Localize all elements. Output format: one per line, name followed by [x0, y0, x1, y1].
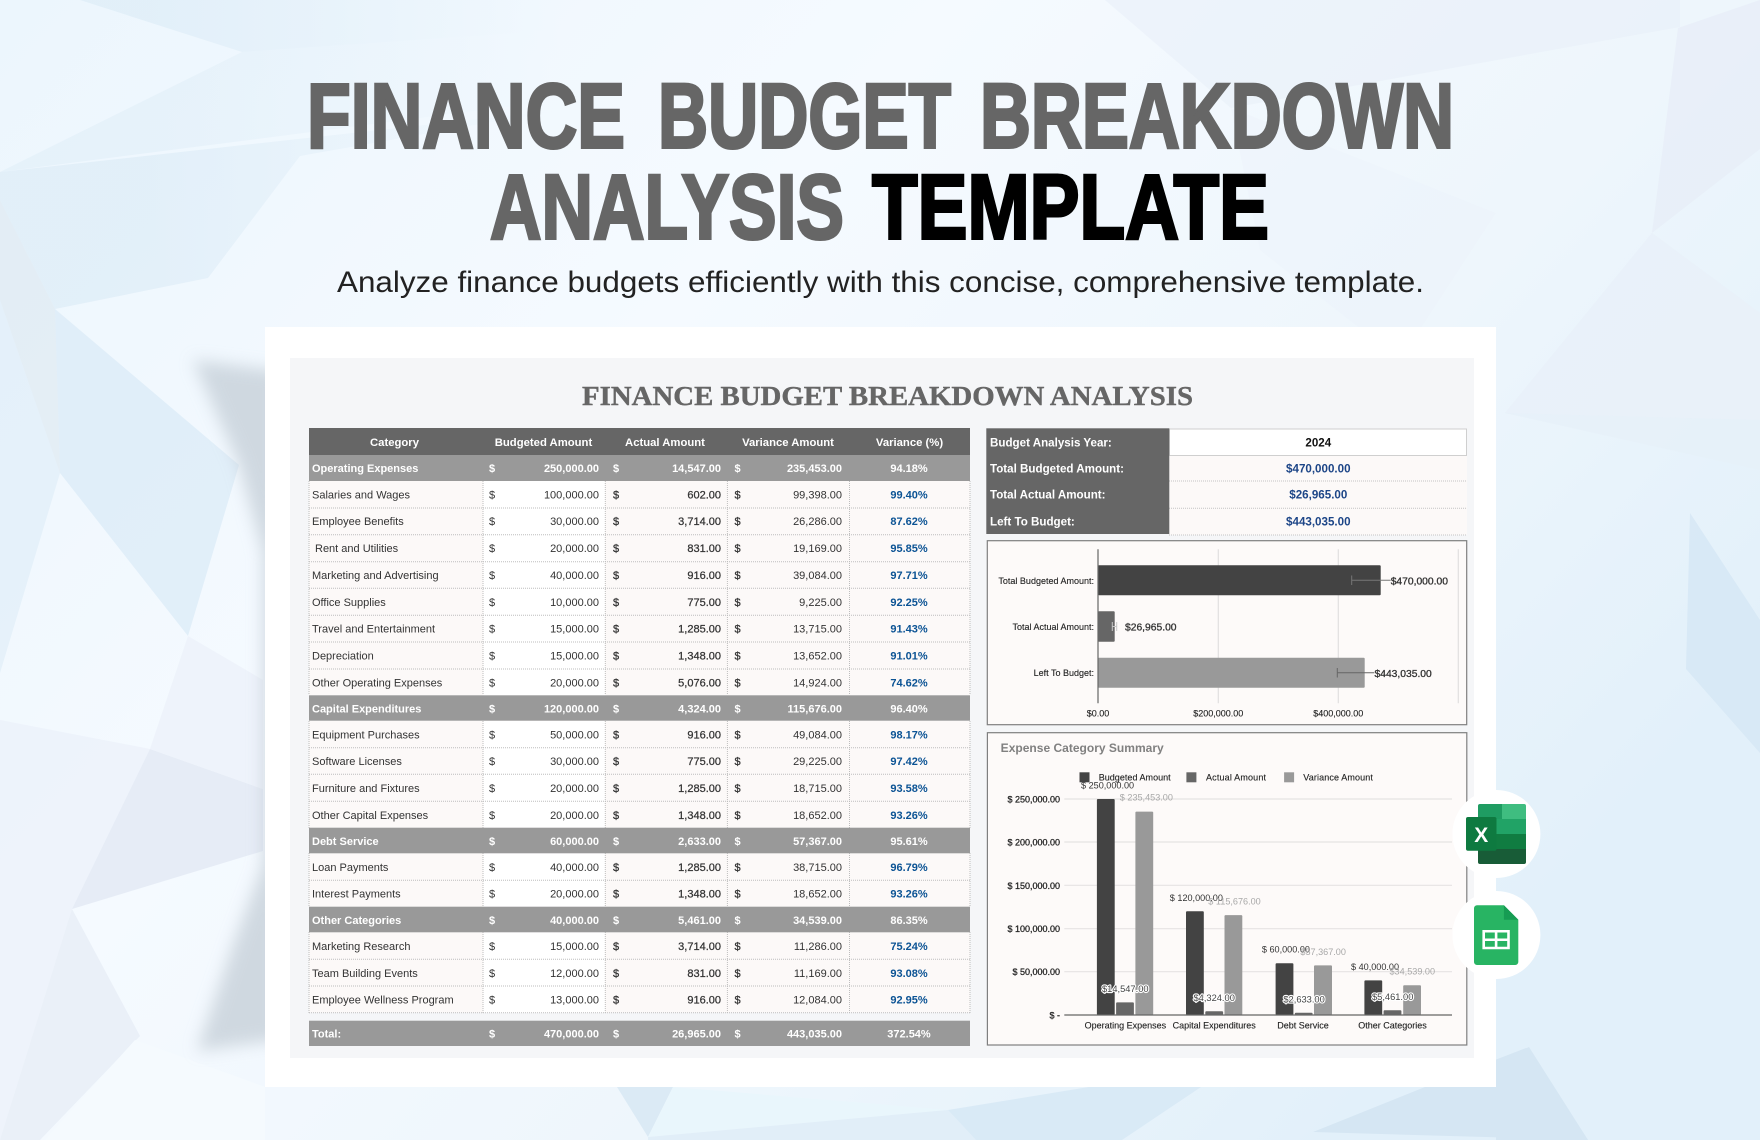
row: Equipment Purchases: Equipment Purchases [312, 730, 420, 742]
row: Travel and Entertainment: 91.43% [890, 624, 928, 636]
y axis labels: $ 150,000.00 [1007, 881, 1060, 891]
x axis labels [1087, 708, 1363, 718]
summary: left to budget [990, 516, 1351, 528]
legend: Budgeted Amount [1099, 772, 1171, 782]
data labels: $57,367.00 [1300, 947, 1346, 957]
row: Salaries and Wages [312, 490, 928, 502]
row: Other Operating Expenses: 74.62% [890, 678, 928, 690]
row: Marketing Research: 15,000.00 [550, 941, 599, 953]
section: Capital Expenditures: 115,676.00 [788, 703, 842, 715]
row: Interest Payments: 1,348.00 [678, 889, 721, 901]
x axis categories [1085, 1020, 1427, 1030]
row: Other Capital Expenses: $ [613, 810, 619, 822]
section: Other Categories: 5,461.00 [678, 915, 721, 927]
row: Marketing Research [312, 941, 928, 953]
subtitle: Analyze finance budgets efficiently with this concise, comprehensive template. [337, 266, 1424, 299]
bar: total budgeted [998, 565, 1448, 595]
row: Employee Wellness Program [312, 994, 928, 1006]
legend: Actual Amount [1206, 772, 1266, 782]
total row: 372.54% [887, 1028, 931, 1040]
row: Other Capital Expenses: $ [489, 810, 495, 822]
section: Operating Expenses: 94.18% [890, 463, 928, 475]
row: Depreciation: 91.01% [890, 650, 928, 662]
data labels: $4,324.00 [1194, 993, 1235, 1003]
summary block [986, 428, 1467, 535]
section: Debt Service: $ [734, 836, 741, 848]
row: Employee Benefits: $ [734, 516, 741, 528]
panel heading: FINANCE BUDGET BREAKDOWN ANALYSIS [582, 381, 1193, 411]
row: Salaries and Wages: $ [489, 490, 495, 502]
data labels [1081, 780, 1435, 1004]
x axis labels: $0.00 [1087, 708, 1109, 718]
y axis labels: $ 50,000.00 [1012, 967, 1060, 977]
data labels: $ 115,676.00 [1208, 896, 1261, 906]
section: Other Categories: $ [734, 915, 741, 927]
row: Other Capital Expenses: 20,000.00 [550, 810, 599, 822]
row: Marketing and Advertising: 39,084.00 [793, 570, 842, 582]
section: Operating Expenses: 250,000.00 [544, 463, 599, 475]
row: Travel and Entertainment: $ [613, 624, 619, 636]
row: Other Capital Expenses: Other Capital Expenses [312, 810, 429, 822]
row: Other Capital Expenses: $ [734, 810, 741, 822]
row: Travel and Entertainment: Travel and Entertainment [312, 624, 435, 636]
total row: 470,000.00 [544, 1028, 599, 1040]
row: Salaries and Wages: 602.00 [687, 490, 721, 502]
row: Team Building Events: $ [613, 968, 619, 980]
table header: Budgeted Amount [495, 437, 592, 449]
section: Capital Expenditures: 4,324.00 [678, 703, 721, 715]
row: Depreciation: 1,348.00 [678, 650, 721, 662]
data labels: $5,461.00 [1372, 992, 1413, 1002]
legend [1080, 772, 1373, 782]
row: Employee Wellness Program: 92.95% [890, 994, 928, 1006]
row: Marketing and Advertising: $ [734, 570, 741, 582]
summary: left to budget: Left To Budget: [990, 516, 1075, 528]
row: Software Licenses: 29,225.00 [793, 756, 842, 768]
bar: left to budget: $443,035.00 [1374, 669, 1432, 680]
row: Equipment Purchases: 98.17% [890, 730, 928, 742]
row: Furniture and Fixtures: 93.58% [890, 783, 928, 795]
title: TEMPLATE [872, 156, 1269, 258]
row: Marketing and Advertising [312, 570, 928, 582]
row: Rent and Utilities: $ [613, 543, 619, 555]
row: Marketing and Advertising: $ [613, 570, 619, 582]
row: Marketing and Advertising: 40,000.00 [550, 570, 599, 582]
row: Depreciation: 15,000.00 [550, 650, 599, 662]
total row: $ [613, 1028, 619, 1040]
row: Office Supplies: $ [489, 597, 495, 609]
section: Other Categories: 40,000.00 [550, 915, 599, 927]
row: Other Operating Expenses: 20,000.00 [550, 678, 599, 690]
section: Debt Service: $ [489, 836, 495, 848]
row: Other Capital Expenses: 1,348.00 [678, 810, 721, 822]
row: Interest Payments: $ [613, 889, 619, 901]
section: Capital Expenditures: $ [613, 703, 619, 715]
icon: Google Sheets [1452, 891, 1540, 979]
row: Office Supplies [312, 597, 928, 609]
row: Team Building Events: 93.08% [890, 968, 928, 980]
row: Loan Payments: 1,285.00 [678, 862, 721, 874]
row: Travel and Entertainment [312, 624, 928, 636]
row: Furniture and Fixtures: $ [734, 783, 741, 795]
row: Software Licenses: Software Licenses [312, 756, 402, 768]
row: Employee Benefits: 3,714.00 [678, 516, 721, 528]
section: Capital Expenditures: 96.40% [890, 703, 928, 715]
row: Software Licenses: 97.42% [890, 756, 928, 768]
row: Marketing Research: $ [734, 941, 741, 953]
section: Operating Expenses: 235,453.00 [787, 463, 842, 475]
summary: year: 2024 [1305, 436, 1332, 450]
row: Office Supplies: 9,225.00 [799, 597, 842, 609]
total row [312, 1028, 931, 1040]
row: Marketing Research: Marketing Research [312, 941, 410, 953]
row: Equipment Purchases: $ [734, 730, 741, 742]
row: Other Operating Expenses: 14,924.00 [793, 678, 842, 690]
row: Other Capital Expenses [312, 810, 928, 822]
row: Rent and Utilities: $ [734, 543, 741, 555]
row: Rent and Utilities: 831.00 [687, 543, 721, 555]
x axis categories: Capital Expenditures [1173, 1020, 1256, 1030]
total row: 26,965.00 [672, 1028, 721, 1040]
row: Travel and Entertainment: $ [734, 624, 741, 636]
x axis labels: $400,000.00 [1313, 708, 1363, 718]
total row: Total: [312, 1028, 341, 1040]
bars: Capital Expenditures [1186, 911, 1242, 1015]
row: Employee Benefits: $ [489, 516, 495, 528]
x axis labels: $200,000.00 [1193, 708, 1243, 718]
y axis labels: $ 200,000.00 [1007, 838, 1060, 848]
row: Travel and Entertainment: 1,285.00 [678, 624, 721, 636]
title: BREAKDOWN [980, 66, 1454, 168]
row: Furniture and Fixtures: $ [489, 783, 495, 795]
row: Employee Wellness Program: $ [613, 994, 619, 1006]
row: Equipment Purchases [312, 730, 928, 742]
section: Debt Service: 95.61% [890, 836, 928, 848]
bar: total actual: $26,965.00 [1125, 622, 1177, 634]
bar: left to budget: Left To Budget: [1034, 668, 1094, 678]
section: Other Categories: $ [613, 915, 619, 927]
section: Debt Service [312, 836, 928, 848]
row: Furniture and Fixtures: 1,285.00 [678, 783, 721, 795]
bar: left to budget [1034, 658, 1432, 688]
total row: $ [734, 1028, 741, 1040]
summary: year: Budget Analysis Year: [990, 436, 1112, 450]
x axis categories: Operating Expenses [1085, 1020, 1167, 1030]
row: Interest Payments: 93.26% [890, 889, 928, 901]
row: Loan Payments: 96.79% [890, 862, 928, 874]
row: Office Supplies: 775.00 [687, 597, 721, 609]
row: Equipment Purchases: 916.00 [687, 730, 721, 742]
data labels: $ 60,000.00 [1262, 945, 1310, 955]
x axis categories: Other Categories [1358, 1020, 1427, 1030]
table header: Category [370, 437, 420, 449]
row: Employee Benefits: 26,286.00 [793, 516, 842, 528]
summary: total budgeted: Total Budgeted Amount: [990, 462, 1124, 476]
row: Team Building Events [312, 968, 928, 980]
section: Operating Expenses: $ [613, 463, 619, 475]
row: Furniture and Fixtures: $ [613, 783, 619, 795]
row: Salaries and Wages: 100,000.00 [544, 490, 599, 502]
row: Marketing and Advertising: 916.00 [687, 570, 721, 582]
row: Rent and Utilities: 19,169.00 [793, 543, 842, 555]
row: Equipment Purchases: 50,000.00 [550, 730, 599, 742]
row: Team Building Events: 11,169.00 [794, 968, 842, 980]
row: Team Building Events: Team Building Events [312, 968, 418, 980]
row: Office Supplies: Office Supplies [312, 597, 386, 609]
chart title: Expense Category Summary [1001, 741, 1164, 755]
section: Capital Expenditures [312, 703, 928, 715]
row: Software Licenses: $ [613, 756, 619, 768]
bar: total budgeted: Total Budgeted Amount: [998, 576, 1094, 586]
row: Office Supplies: 10,000.00 [550, 597, 599, 609]
row: Employee Wellness Program: 13,000.00 [550, 994, 599, 1006]
bar chart: expense category summary [987, 733, 1467, 1045]
row: Interest Payments: 18,652.00 [793, 889, 842, 901]
y axis labels: $ - [1049, 1010, 1060, 1020]
summary: left to budget: $443,035.00 [1286, 516, 1351, 528]
row: Travel and Entertainment: $ [489, 624, 495, 636]
row: Employee Benefits: 87.62% [890, 516, 928, 528]
row: Team Building Events: $ [489, 968, 495, 980]
row: Depreciation: Depreciation [312, 650, 374, 662]
bar chart: budget totals [987, 541, 1467, 725]
section: Capital Expenditures: $ [734, 703, 741, 715]
bar: total actual: Total Actual Amount: [1012, 622, 1094, 632]
row: Other Capital Expenses: 93.26% [890, 810, 928, 822]
row: Loan Payments: Loan Payments [312, 862, 389, 874]
title: ANALYSIS [490, 156, 844, 258]
row: Marketing Research: 3,714.00 [678, 941, 721, 953]
row: Software Licenses: 30,000.00 [550, 756, 599, 768]
row: Other Operating Expenses: 5,076.00 [678, 678, 721, 690]
data labels: $34,539.00 [1390, 967, 1435, 977]
data labels: $ 250,000.00 [1081, 780, 1134, 790]
title: FINANCE [307, 66, 625, 168]
row: Equipment Purchases: $ [489, 730, 495, 742]
row: Interest Payments: Interest Payments [312, 889, 401, 901]
data labels: $ 235,453.00 [1120, 793, 1173, 803]
row: Team Building Events: $ [734, 968, 741, 980]
section: Capital Expenditures: 120,000.00 [544, 703, 599, 715]
icon: Excel: X [1474, 824, 1488, 847]
row: Software Licenses: $ [489, 756, 495, 768]
row: Employee Wellness Program: Employee Wellness Program [312, 994, 454, 1006]
row: Employee Wellness Program: $ [489, 994, 495, 1006]
row: Travel and Entertainment: 15,000.00 [550, 624, 599, 636]
row: Employee Wellness Program: 12,084.00 [793, 994, 842, 1006]
summary: total budgeted: $470,000.00 [1286, 462, 1351, 476]
row: Software Licenses: 775.00 [687, 756, 721, 768]
row: Salaries and Wages: $ [734, 490, 741, 502]
row: Software Licenses: $ [734, 756, 741, 768]
data labels: $2,633.00 [1283, 994, 1325, 1004]
row: Employee Benefits: 30,000.00 [550, 516, 599, 528]
row: Loan Payments: $ [613, 862, 619, 874]
section: Operating Expenses: $ [734, 463, 741, 475]
data labels: $ 120,000.00 [1170, 893, 1223, 903]
table header: Variance (%) [876, 437, 943, 449]
row: Other Capital Expenses: 18,652.00 [793, 810, 842, 822]
row: Furniture and Fixtures: 18,715.00 [793, 783, 842, 795]
row: Office Supplies: $ [613, 597, 619, 609]
row: Employee Benefits: $ [613, 516, 619, 528]
section: Other Categories: 86.35% [890, 915, 928, 927]
bars: Operating Expenses [1097, 799, 1153, 1015]
row: Marketing Research: $ [613, 941, 619, 953]
row: Depreciation: $ [613, 650, 619, 662]
row: Team Building Events: 12,000.00 [550, 968, 599, 980]
row: Loan Payments: $ [734, 862, 741, 874]
y axis labels: $ 250,000.00 [1007, 794, 1060, 804]
row: Employee Benefits [312, 516, 928, 528]
table header: Actual Amount [625, 437, 705, 449]
section: Debt Service: 60,000.00 [550, 836, 599, 848]
row: Depreciation [312, 650, 928, 662]
section: Debt Service: 57,367.00 [793, 836, 842, 848]
x axis categories: Debt Service [1277, 1020, 1329, 1030]
section: Capital Expenditures: Capital Expenditures [312, 703, 421, 715]
row: Software Licenses [312, 756, 928, 768]
row: Office Supplies: 92.25% [890, 597, 928, 609]
shadow behind card [193, 360, 280, 1051]
row: Salaries and Wages: $ [613, 490, 619, 502]
section: Debt Service: Debt Service [312, 836, 379, 848]
bars: Debt Service [1276, 963, 1332, 1015]
bar: total budgeted: $470,000.00 [1391, 576, 1448, 588]
section: Debt Service: 2,633.00 [678, 836, 721, 848]
bar: total actual [1012, 611, 1177, 642]
row: Loan Payments: $ [489, 862, 495, 874]
row: Marketing Research: 75.24% [890, 941, 928, 953]
row: Team Building Events: 831.00 [687, 968, 721, 980]
row: Rent and Utilities: 95.85% [890, 543, 928, 555]
data labels: $14,547.00 [1102, 984, 1149, 994]
row: Marketing and Advertising: 97.71% [890, 570, 928, 582]
row: Salaries and Wages: 99.40% [890, 490, 928, 502]
row: Loan Payments: 40,000.00 [550, 862, 599, 874]
summary: total actual: $26,965.00 [1289, 488, 1347, 502]
total row: 443,035.00 [787, 1028, 842, 1040]
summary: year [990, 436, 1332, 450]
row: Marketing and Advertising: Marketing and Advertising [312, 570, 439, 582]
row: Furniture and Fixtures [312, 783, 928, 795]
table: budget breakdown [309, 428, 970, 1046]
row: Salaries and Wages: 99,398.00 [793, 490, 842, 502]
row: Furniture and Fixtures: Furniture and Fixtures [312, 783, 420, 795]
row: Other Operating Expenses: Other Operating Expenses [312, 678, 443, 690]
row: Marketing and Advertising: $ [489, 570, 495, 582]
row: Equipment Purchases: $ [613, 730, 619, 742]
y axis labels [1007, 794, 1060, 1020]
row: Other Operating Expenses: $ [489, 678, 495, 690]
section: Other Categories: Other Categories [312, 915, 401, 927]
section: Other Categories [312, 915, 928, 927]
legend: Variance Amount [1303, 772, 1373, 782]
summary: total actual: Total Actual Amount: [990, 488, 1106, 502]
row: Loan Payments: 38,715.00 [793, 862, 842, 874]
icon: Excel [1452, 790, 1540, 878]
row: Interest Payments: 20,000.00 [550, 889, 599, 901]
row: Employee Wellness Program: $ [734, 994, 741, 1006]
y axis labels: $ 100,000.00 [1007, 924, 1060, 934]
section: Operating Expenses: 14,547.00 [672, 463, 721, 475]
row: Rent and Utilities: Rent and Utilities [315, 543, 399, 555]
row: Depreciation: $ [734, 650, 741, 662]
section: Operating Expenses: Operating Expenses [312, 463, 418, 475]
total row: $ [489, 1028, 495, 1040]
row: Rent and Utilities: $ [489, 543, 495, 555]
row: Travel and Entertainment: 13,715.00 [793, 624, 842, 636]
data labels: $ 40,000.00 [1351, 962, 1399, 972]
row: Depreciation: 13,652.00 [793, 650, 842, 662]
row: Other Operating Expenses: $ [734, 678, 741, 690]
row: Marketing Research: $ [489, 941, 495, 953]
row: Employee Benefits: Employee Benefits [312, 516, 404, 528]
section: Other Categories: $ [489, 915, 495, 927]
section: Debt Service: $ [613, 836, 619, 848]
section: Operating Expenses: $ [489, 463, 495, 475]
table header [370, 437, 943, 449]
bars: Other Categories [1364, 980, 1421, 1015]
row: Rent and Utilities [315, 543, 928, 555]
row: Rent and Utilities: 20,000.00 [550, 543, 599, 555]
row: Loan Payments [312, 862, 928, 874]
row: Equipment Purchases: 49,084.00 [793, 730, 842, 742]
section: Capital Expenditures: $ [489, 703, 495, 715]
row: Employee Wellness Program: 916.00 [687, 994, 721, 1006]
row: Interest Payments: $ [489, 889, 495, 901]
row: Marketing Research: 11,286.00 [794, 941, 842, 953]
row: Interest Payments: $ [734, 889, 741, 901]
section: Operating Expenses [312, 463, 928, 475]
row: Depreciation: $ [489, 650, 495, 662]
summary: total budgeted [990, 462, 1351, 476]
row: Interest Payments [312, 889, 928, 901]
row: Furniture and Fixtures: 20,000.00 [550, 783, 599, 795]
table header: Variance Amount [742, 437, 834, 449]
row: Office Supplies: $ [734, 597, 741, 609]
row: Salaries and Wages: Salaries and Wages [312, 490, 411, 502]
section: Other Categories: 34,539.00 [793, 915, 842, 927]
title: BUDGET [658, 66, 951, 168]
panel: white card [265, 327, 1496, 1087]
summary: total actual [990, 488, 1347, 502]
row: Other Operating Expenses: $ [613, 678, 619, 690]
row: Other Operating Expenses [312, 678, 928, 690]
title [307, 66, 1454, 258]
